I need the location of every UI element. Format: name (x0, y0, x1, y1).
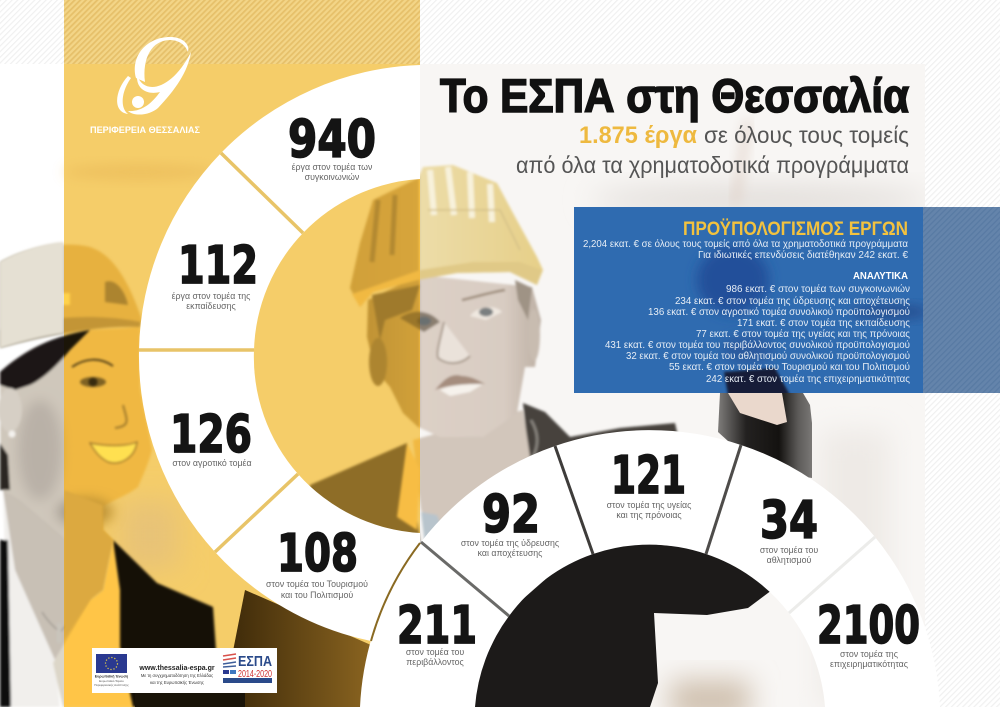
sector: 126 agriculture: στον αγροτικό τομέα (172, 458, 252, 468)
raised arm sleeve (718, 393, 812, 478)
logo: Region of Thessaly (90, 37, 201, 135)
sector: 92 water supply: 92 (482, 485, 540, 545)
icon: ESPA 2014-2020 (223, 653, 272, 683)
sector: 112 education (139, 153, 303, 350)
panel: project budget: 242 εκατ. € στον τομέα της επιχειρηματικότητας (706, 373, 910, 385)
subtitle: από όλα τα χρηματοδοτικά προγράμματα (516, 152, 909, 178)
sector: 92 water supply: και αποχέτευσης (478, 548, 542, 558)
icon: ESPA 2014-2020: 2014-2020 (238, 669, 272, 680)
panel: project budget: Για ιδιωτικές επενδύσεις διατέθηκαν 242 εκατ. € (698, 249, 908, 261)
sector: 108 tourism: και του Πολιτισμού (281, 590, 353, 600)
sector: 2100 entrepreneurship: στον τομέα της (840, 649, 898, 659)
sector: 121 health: 121 (611, 446, 686, 506)
sector: 211 environment: περιβάλλοντος (406, 657, 464, 667)
panel: project budget: 136 εκατ. € στον αγροτικό τομέα συνολικού προϋπολογισμού (648, 306, 910, 318)
icon: EU flag: Ευρωπαϊκή Ένωση (95, 674, 128, 678)
panel: project budget: 986 εκατ. € στον τομέα των συγκοινωνιών (726, 283, 910, 295)
sector: 940 transport: έργα στον τομέα των (292, 162, 373, 172)
sector: 211 environment: στον τομέα του (406, 647, 464, 657)
sector: 92 water supply (421, 446, 593, 616)
sponsor logos strip: και της Ευρωπαϊκής Ένωσης (150, 680, 204, 685)
sector: 126 agriculture (139, 350, 298, 552)
icon: ESPA 2014-2020: ΕΣΠΑ (238, 653, 272, 670)
upper ring of sectors (139, 65, 420, 641)
sector: 2100 entrepreneurship: επιχειρηματικότητας (830, 659, 908, 669)
sector: 92 water supply: στον τομέα της ύδρευσης (461, 538, 559, 548)
sector: 112 education: εκπαίδευσης (186, 301, 236, 311)
sector: 34 sports: 34 (760, 491, 818, 551)
sector: 2100 entrepreneurship (789, 537, 940, 707)
photo: man with helmet (310, 165, 680, 570)
panel: project budget: 55 εκατ. € στον τομέα του Τουρισμού και του Πολιτισμού (669, 361, 910, 373)
yellow panel (64, 0, 420, 707)
sector: 34 sports: στον τομέα του (760, 545, 818, 555)
sector: 108 tourism (215, 474, 420, 641)
sector: 108 tourism: στον τομέα του Τουρισμού (266, 579, 368, 589)
sponsor logos strip: Με τη συγχρηματοδότηση της Ελλάδας (141, 673, 213, 678)
sponsor logos strip: www.thessalia-espa.gr (138, 665, 215, 672)
sector: 940 transport (221, 65, 420, 233)
sector: 121 health (555, 430, 741, 554)
panel: project budget: 171 εκατ. € στον τομέα της εκπαίδευσης (737, 317, 910, 329)
sector: 34 sports: αθλητισμού (767, 555, 812, 565)
title (440, 69, 909, 178)
panel: project budget: 2,204 εκατ. € σε όλους τους τομείς από όλα τα χρηματοδοτικά προγράμματα (583, 238, 908, 250)
sector: 940 transport: 940 (288, 110, 376, 170)
background photo blurred (420, 64, 930, 707)
sector: 108 tourism: 108 (277, 524, 358, 584)
panel: project budget: ΑΝΑΛΥΤΙΚΑ (853, 271, 908, 282)
sector: 34 sports (706, 445, 875, 613)
dark jacket foreground (474, 543, 772, 707)
sector: 112 education: έργα στον τομέα της (172, 291, 250, 301)
sector: 211 environment: 211 (397, 596, 477, 656)
panel: project budget: ΠΡΟΫΠΟΛΟΓΙΣΜΟΣ ΕΡΓΩΝ (683, 219, 908, 240)
icon: EU flag: Ευρωπαϊκό Ταμείο (99, 679, 124, 683)
logo: Region of Thessaly: ΠΕΡΙΦΕΡΕΙΑ ΘΕΣΣΑΛΙΑΣ (90, 125, 201, 135)
panel: project budget: 32 εκατ. € στον τομέα του αθλητισμού συνολικού προϋπολογισμού (626, 350, 910, 362)
sector: 940 transport: συγκοινωνιών (305, 172, 360, 182)
sponsor logos strip (92, 648, 277, 693)
sector: 2100 entrepreneurship: 2100 (817, 596, 920, 656)
subtitle: σε όλους τους τομείς (704, 122, 909, 148)
icon: EU flag (94, 654, 129, 687)
lower ring of sectors (360, 430, 940, 707)
panel: project budget: 234 εκατ. € στον τομέα της ύδρευσης και αποχέτευσης (675, 295, 910, 307)
sector: 211 environment (360, 542, 509, 707)
photo: woman with helmet (0, 242, 371, 707)
title: Το ΕΣΠΑ στη Θεσσαλία (440, 69, 909, 122)
panel: project budget: 77 εκατ. € στον τομέα της υγείας και της πρόνοιας (696, 328, 910, 340)
sector: 112 education: 112 (178, 236, 258, 296)
subtitle: 1.875 έργα (579, 122, 697, 149)
icon: EU flag: Περιφερειακής Ανάπτυξης (94, 683, 129, 687)
sector: 121 health: στον τομέα της υγείας (607, 500, 691, 510)
sector: 126 agriculture: 126 (170, 405, 252, 465)
panel: project budget: 431 εκατ. € στον τομέα του περιβάλλοντος συνολικού προϋπολογισμού (605, 339, 910, 351)
sector: 121 health: και της πρόνοιας (616, 510, 682, 520)
subtitle (516, 122, 909, 178)
panel: project budget (574, 207, 1000, 395)
